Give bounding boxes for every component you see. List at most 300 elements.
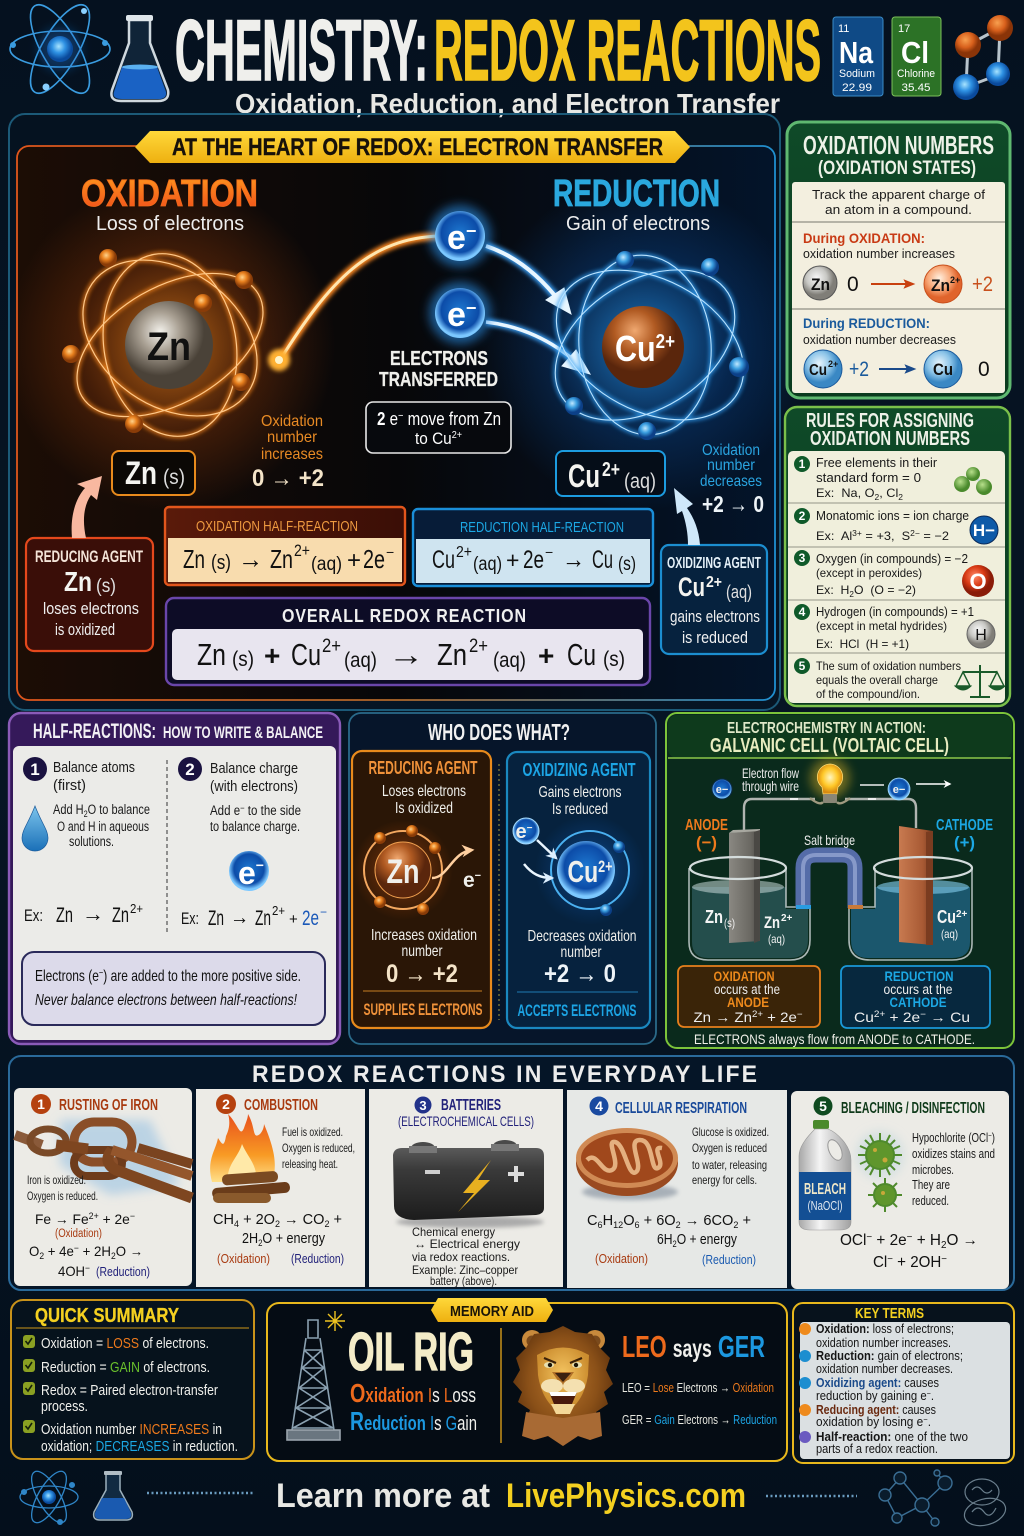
electron 1: e [447,219,466,257]
rule 1: 2 [875,493,880,502]
example 2: Ex: [181,909,199,928]
footer note: ELECTRONS always flow from ANODE to CATHODE. [694,1031,975,1047]
callout: electrons note [22,952,325,1025]
reduction at cathode box [841,966,990,1028]
oxidizing agent card: Cu [568,854,609,889]
ion labels [705,907,968,946]
oxidizing agent card: e [516,821,527,843]
rule 5: The sum of oxidation numbers [816,659,961,673]
equations: → CO [280,1212,324,1228]
panel: half-reactions [9,713,340,1044]
number and title: 3 [419,1098,427,1113]
explanation: oxidizes stains and [912,1147,995,1161]
equations: O [623,1213,635,1229]
term: oxidizing agent: . [931,1389,934,1403]
heading [803,130,994,179]
rule 1: standard form = 0 [816,471,921,485]
equations: 6 [635,1220,640,1230]
summary lines: Reduction = GAIN of electrons. [41,1360,210,1376]
reduction half-reaction: + [506,547,519,573]
subtitle: Oxidation, Reduction, and Electron Transfer [235,88,780,119]
label: oxidation number decreases: +2 → 0 [702,491,764,517]
ion labels: 2+ [781,913,793,924]
footer [20,1466,1009,1530]
icon: atom [10,0,110,101]
term: reducing agent [799,1403,936,1429]
heading: (OXIDATION STATES) [818,158,976,179]
step 2: to the side [245,803,301,818]
number and title [398,1096,534,1129]
badge: MEMORY AID [450,1303,534,1320]
heading: oxidation [81,173,258,235]
icon: electron: − [256,857,264,873]
electron 2 [429,282,491,344]
card: bleaching [791,1091,1009,1289]
explanation: Oxygen is reduced, [282,1141,355,1155]
heading: QUICK SUMMARY [35,1305,180,1327]
equations: (Reduction) [702,1252,756,1267]
equations: 2 [324,1219,329,1229]
number and title: BATTERIES [441,1097,501,1114]
reducing agent card: e [463,869,475,892]
equations: (Oxidation) [55,1228,102,1240]
electron flow labels: e− [716,784,728,796]
equations: O + energy [262,1231,326,1247]
zinc atom [53,228,287,448]
equations: O + energy [677,1232,738,1248]
electron 2: e [447,296,466,334]
element tile: chlorine: Chlorine [897,68,935,80]
equations: 2 [673,1239,677,1249]
number and title [814,1096,985,1117]
explanation: releasing heat. [282,1157,338,1171]
oxidizing agent card: Is reduced [552,801,608,818]
equations: CH [213,1212,234,1228]
equations [840,1232,978,1271]
term: reduction: oxidation number decreases. [816,1362,953,1376]
rule 3: 3 [799,551,806,565]
beaker water [692,880,970,958]
LEO definition: LEO = Lose Electrons → Oxidation [622,1380,774,1395]
box: Cu2+(aq) [556,451,665,496]
oxidizing agent card: − [527,823,533,834]
reduction half-reaction [413,509,653,586]
equations: (Oxidation) [595,1251,648,1266]
heading: reduction: REDUCTION [553,173,720,215]
equations: 4OH [58,1263,87,1279]
panel: memory aid [267,1298,787,1461]
element tile: sodium: 22.99 [842,82,872,94]
illustration: campfire [210,1114,290,1203]
element tile: sodium: Sodium [839,68,875,80]
electron 1: − [466,221,476,241]
equations: 6H [657,1232,676,1248]
illustration: chain [15,1120,192,1198]
explanation [282,1125,355,1171]
example 1: Zn [56,904,73,927]
equations: + 4e [44,1243,74,1259]
example 2: 2e [302,907,319,930]
step 1: O to balance [88,802,150,817]
element tile: sodium [833,17,883,96]
equations: 2 [39,1251,44,1261]
oxidizing agent card: ACCEPTS ELECTRONS [518,1001,636,1020]
overall redox reaction: (s) [232,648,254,671]
element tile: sodium: Na [839,35,874,70]
equations: − [130,1211,135,1221]
during oxidation: +2 [972,273,993,296]
rule 4 [794,604,995,651]
overall redox reaction: + [264,640,280,671]
explanation: reduced. [912,1194,949,1208]
dotted line [147,1492,255,1494]
label: electrons transferred: TRANSFERRED [379,369,498,391]
equations: + 2O [239,1212,275,1228]
equations: + 2e [99,1211,130,1227]
term: oxidizing agent: Oxidizing agent: causes [816,1376,939,1390]
box: Cu2+(aq): (aq) [624,470,656,493]
callout: oxidizing agent: (aq) [726,582,752,602]
wire and bulb [744,758,916,832]
reducing agent card: REDUCING AGENT [368,758,478,778]
panel: quick summary [11,1300,254,1459]
during oxidation: 0 [847,273,859,296]
example 2: → [230,906,249,929]
term: half-reaction [799,1430,968,1456]
oxidizing agent card: +2 → 0 [544,960,616,988]
oxidation half-reaction: (aq) [311,554,342,575]
during reduction: Cu [933,360,953,379]
equations: 4 [234,1219,239,1229]
label: electrons transferred [379,348,498,391]
explanation: ) [992,1131,995,1145]
during reduction: +2 [849,358,869,381]
icon: molecule [953,15,1013,100]
example 1: → [82,901,104,926]
GER definition: GER = Gain Electrons → Reduction [622,1412,777,1427]
term: half-reaction: Half-reaction: one of the two [816,1430,968,1444]
explanation [912,1131,995,1208]
rule 3: Oxygen (in compounds) = −2 [816,552,968,566]
explanation: Example: Zinc–copper [412,1263,518,1277]
element tile: chlorine [892,17,941,96]
rule 3: O (O = −2) [854,583,916,597]
rule 4: Ex: HCl (H = +1) [816,637,909,651]
reduction at cathode box: Cu [854,1009,872,1025]
overall redox reaction: OVERALL REDOX REACTION [282,605,526,626]
callout: reducing agent: Zn [64,566,92,597]
callout: oxidizing agent: gains electrons [670,607,760,626]
element tile: chlorine: 17 [898,23,910,35]
rule 2: H− [973,521,995,540]
explanation: Glucose is oxidized. [692,1125,769,1139]
oxidation at anode box: ANODE [727,994,769,1010]
icon: mitochondrion outline [961,1479,1009,1530]
explanation: energy for cells. [692,1173,757,1187]
step 1: 1 [30,760,40,779]
equations: H [603,1213,613,1229]
heading: HALF-REACTIONS: [33,720,156,743]
reducing agent card: Zn [386,853,420,891]
equations: 2 [111,1251,116,1261]
callout: oxidizing agent: Cu [678,572,705,602]
oxidizing agent card: OXIDIZING AGENT [522,760,636,780]
heading [806,410,974,450]
equations: + H [912,1232,941,1249]
term: reducing agent: Reducing agent: causes [816,1403,936,1417]
term: reduction: Reduction: gain of electrons; [816,1349,963,1363]
number and title: COMBUSTION [244,1097,318,1114]
number and title: 1 [37,1096,45,1112]
illustration: bleach bottle: BLEACH [804,1181,846,1198]
explanation: to water, releasing [692,1158,767,1172]
oxidation half-reaction: Zn [183,544,205,574]
during reduction: 2+ [828,359,838,369]
intro text: an atom in a compound. [825,202,972,217]
call to action [276,1477,746,1515]
overall redox reaction: Cu [291,637,321,672]
rule 3: 2 [849,590,855,599]
explanation: They are [912,1178,950,1192]
step 2: − [240,803,245,813]
reduction half-reaction: Cu [432,546,455,574]
reduction at cathode box: REDUCTION [884,968,954,984]
reducing agent card: number [402,943,443,960]
panel: rules for assigning [785,407,1010,706]
rule 1: 1 [799,457,806,471]
term: oxidation: Oxidation: loss of electrons; [816,1322,954,1336]
illustration: bleach bottle [799,1120,851,1230]
equations: − [866,1232,872,1243]
oxidation at anode box: Zn → Zn [694,1009,748,1025]
card: cellular respiration [567,1090,787,1288]
during oxidation: During OXIDATION: [803,230,925,246]
step 1 [22,757,150,851]
overall redox reaction: 2+ [322,636,341,657]
oxidation half-reaction: → [238,544,263,574]
ion labels: Zn [764,913,780,932]
oxidation half-reaction: (s) [211,552,231,574]
callout: reducing agent: is oxidized [55,620,115,639]
rule 3: O [969,569,987,594]
example 2: − [320,905,327,919]
during reduction: During REDUCTION: [803,315,930,331]
step 1: (first) [53,777,86,794]
illustration: bleach bottle: (NaOCl) [808,1198,842,1213]
callout: reducing agent: REDUCING AGENT [35,547,143,566]
oxidation at anode box: + 2e [763,1009,797,1025]
heading: REDOX REACTIONS IN EVERYDAY LIFE [252,1061,757,1088]
rule 2: 3+ [852,529,862,538]
equations: O → [946,1232,978,1249]
label: salt bridge: Salt bridge [804,832,855,848]
explanation: battery (above). [430,1274,497,1288]
step 1: O and H in aqueous [57,819,149,834]
reduction is gain: Reduction Is Gain [350,1406,477,1436]
label: anode: (−) [696,833,717,852]
rule 1 [794,456,992,502]
summary lines: oxidation; DECREASES in reduction. [41,1439,238,1455]
oxidation half-reaction: − [386,544,394,560]
heading: oxidation: Loss of electrons [96,213,244,235]
electron flow labels [712,765,950,800]
rule 1: , Cl [879,486,898,500]
callout: reducing agent: (s) [96,576,116,597]
heading: GALVANIC CELL (VOLTAIC CELL) [710,735,949,757]
term: reduction [799,1349,963,1376]
callout: oxidizing agent [661,545,767,654]
equations: O → [116,1243,143,1259]
during reduction [803,315,990,388]
reducing agent card: Loses electrons [382,783,466,800]
rule 1: 2 [898,493,904,502]
reduction half-reaction: 2e [523,546,544,574]
during oxidation: Zn [811,275,830,294]
rule 1: Free elements in their [816,456,937,470]
step 1: Add H [53,802,91,817]
term: oxidizing agent [799,1376,939,1403]
example 1: Ex: [24,906,43,925]
equations: + 2H [79,1243,111,1259]
oxidation at anode box: occurs at the [714,982,780,997]
example 1 [24,901,143,927]
label: cathode: (+) [954,833,975,852]
during oxidation: Zn [931,276,950,295]
equations: 2 [275,1219,280,1229]
rule 1: Ex: Na, O [816,486,871,500]
electrode: zinc [729,829,760,943]
electrode: copper [899,826,933,945]
label: anode: ANODE [685,817,728,834]
example 2: + [289,911,298,928]
card: batteries [369,1089,563,1288]
reduction at cathode box: 2+ [874,1009,885,1019]
equations [587,1213,756,1267]
equations: + 2e [872,1232,907,1249]
explanation [27,1173,98,1203]
callout: electrons note: Never balance electrons between half-reactions! [35,992,297,1009]
icon: electron [229,851,269,891]
box: Zn(s) [112,451,195,495]
icon: electron: e [238,855,256,891]
term: oxidation [799,1322,954,1350]
example 2: Zn [208,907,224,930]
callout: electrons note: Electrons (e [35,968,120,985]
overall redox reaction: Cu [567,637,596,672]
reduction at cathode box: occurs at the [884,982,952,997]
explanation: Chemical energy [412,1225,495,1239]
oxidizing agent card: Decreases oxidation [528,928,636,945]
equations: − [74,1243,79,1253]
term: reducing agent: − [923,1415,928,1424]
reduction half-reaction: REDUCTION HALF-REACTION [460,519,624,536]
rule 2: = −2 [920,529,949,543]
equations: O [29,1243,40,1259]
during reduction: oxidation number decreases [803,333,956,347]
heading [710,720,949,757]
step 2: Balance charge [210,760,298,777]
equations: − [907,1232,913,1243]
term: reducing agent: oxidation by losing e [816,1415,929,1429]
header [10,0,1013,119]
equations: + 2OH [893,1254,941,1271]
ion labels: (s) [724,916,735,930]
oxidation half-reaction: OXIDATION HALF-REACTION [196,518,358,535]
rule 3: (except in peroxides) [816,566,922,580]
heading: OXIDATION NUMBERS [810,428,970,450]
rule 5: equals the overall charge [816,673,938,687]
callout: reducing agent [26,538,153,651]
reducing agent card: Increases oxidation [371,927,477,944]
equations: 12 [613,1220,623,1230]
label: oxidation number increases [252,413,324,492]
LEO says GER: LEO says GER [622,1329,765,1364]
step 2 [178,757,301,891]
example 1: 2+ [130,901,143,916]
call to action: Learn more at [276,1477,490,1515]
illustration: battery [393,1140,544,1228]
title: CHEMISTRY: [175,3,428,99]
label: oxidation number decreases: Oxidation [702,442,760,459]
label: oxidation number decreases: number [707,457,756,474]
reducing agent card: Is oxidized [395,800,453,817]
electron 2: − [466,298,476,318]
illustration: microbes [856,1131,904,1212]
electron flow labels: e− [893,784,905,796]
number and title: 5 [819,1098,827,1114]
electron flow labels: Electron flow [742,765,800,781]
heading: oxidation: OXIDATION [81,173,258,215]
icon: lion [513,1326,613,1446]
number and title: CELLULAR RESPIRATION [615,1100,747,1117]
equations [29,1211,150,1279]
label: electrons transferred: ELECTRONS [390,348,488,370]
callout: 2 electrons move: − [398,410,403,422]
equations: + [329,1212,342,1228]
rule 4: (except in metal hydrides) [816,619,947,633]
overall redox reaction: Zn [437,637,467,672]
ion labels: Cu [937,907,956,927]
equations: − [85,1263,90,1273]
equations: (Reduction) [96,1265,150,1279]
electron path arrows [268,236,590,374]
label: oxidation number increases: 0 → +2 [252,465,324,492]
reduction at cathode box: + 2e [885,1009,920,1025]
label: cathode: CATHODE [936,817,993,834]
during reduction: 0 [978,358,990,381]
callout: 2 electrons move: move from Zn [403,409,501,429]
ion labels: 2+ [956,909,968,920]
rule 4: 4 [799,605,806,619]
card: combustion [196,1089,365,1287]
number and title [216,1094,318,1114]
reduction half-reaction: (aq) [473,554,502,575]
callout: oxidizing agent: is reduced [682,628,748,647]
callout: 2 electrons move: 2 e [377,409,400,429]
oxidation at anode box: − [797,1009,802,1019]
icon: oil derrick [287,1311,345,1440]
equations: 2+ [89,1211,99,1221]
ion labels: (aq) [941,927,958,941]
oxidation at anode box [678,966,820,1027]
panel: galvanic cell [666,713,1014,1048]
rule 5 [794,658,1005,701]
element tile: chlorine: Cl [901,35,929,70]
example 2: Zn [255,907,271,930]
step 2: Add e [210,803,245,818]
copper atom: 2+ [656,331,675,353]
term: oxidation: oxidation number increases. [816,1336,951,1350]
